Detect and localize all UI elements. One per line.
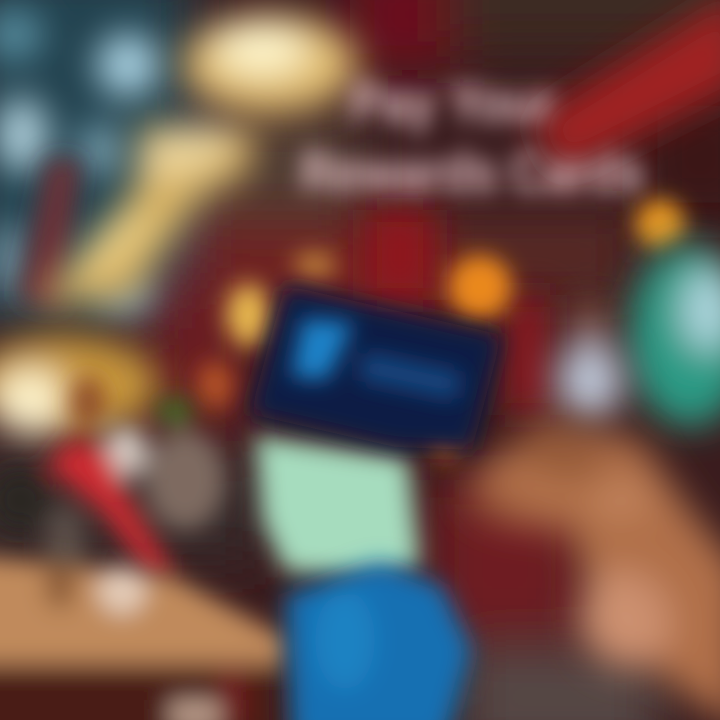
warm glows around the card (197, 253, 337, 409)
pale figure at right (556, 302, 624, 420)
card body (250, 285, 502, 450)
diagonal row of lamps (35, 118, 255, 305)
shirt (255, 435, 420, 578)
ceiling lamps (182, 14, 358, 114)
red ceiling beam (530, 0, 720, 175)
teal object at right (628, 243, 720, 427)
person in red at left (0, 376, 225, 585)
blue trousers (285, 562, 472, 720)
light blue window patches (0, 10, 160, 313)
hand and arm (462, 420, 720, 720)
blurred title text on the wall (300, 70, 645, 205)
card logo (291, 318, 462, 400)
orange lights (430, 199, 685, 460)
blurred title text on the wall: Pay Your (350, 70, 555, 135)
payment card (250, 285, 502, 450)
red pillar behind the card (365, 210, 550, 415)
lower left lamp (0, 335, 160, 436)
red pillar at left (18, 160, 80, 310)
wooden table (0, 555, 290, 720)
blurred title text on the wall: Rewards Cards (300, 140, 645, 205)
